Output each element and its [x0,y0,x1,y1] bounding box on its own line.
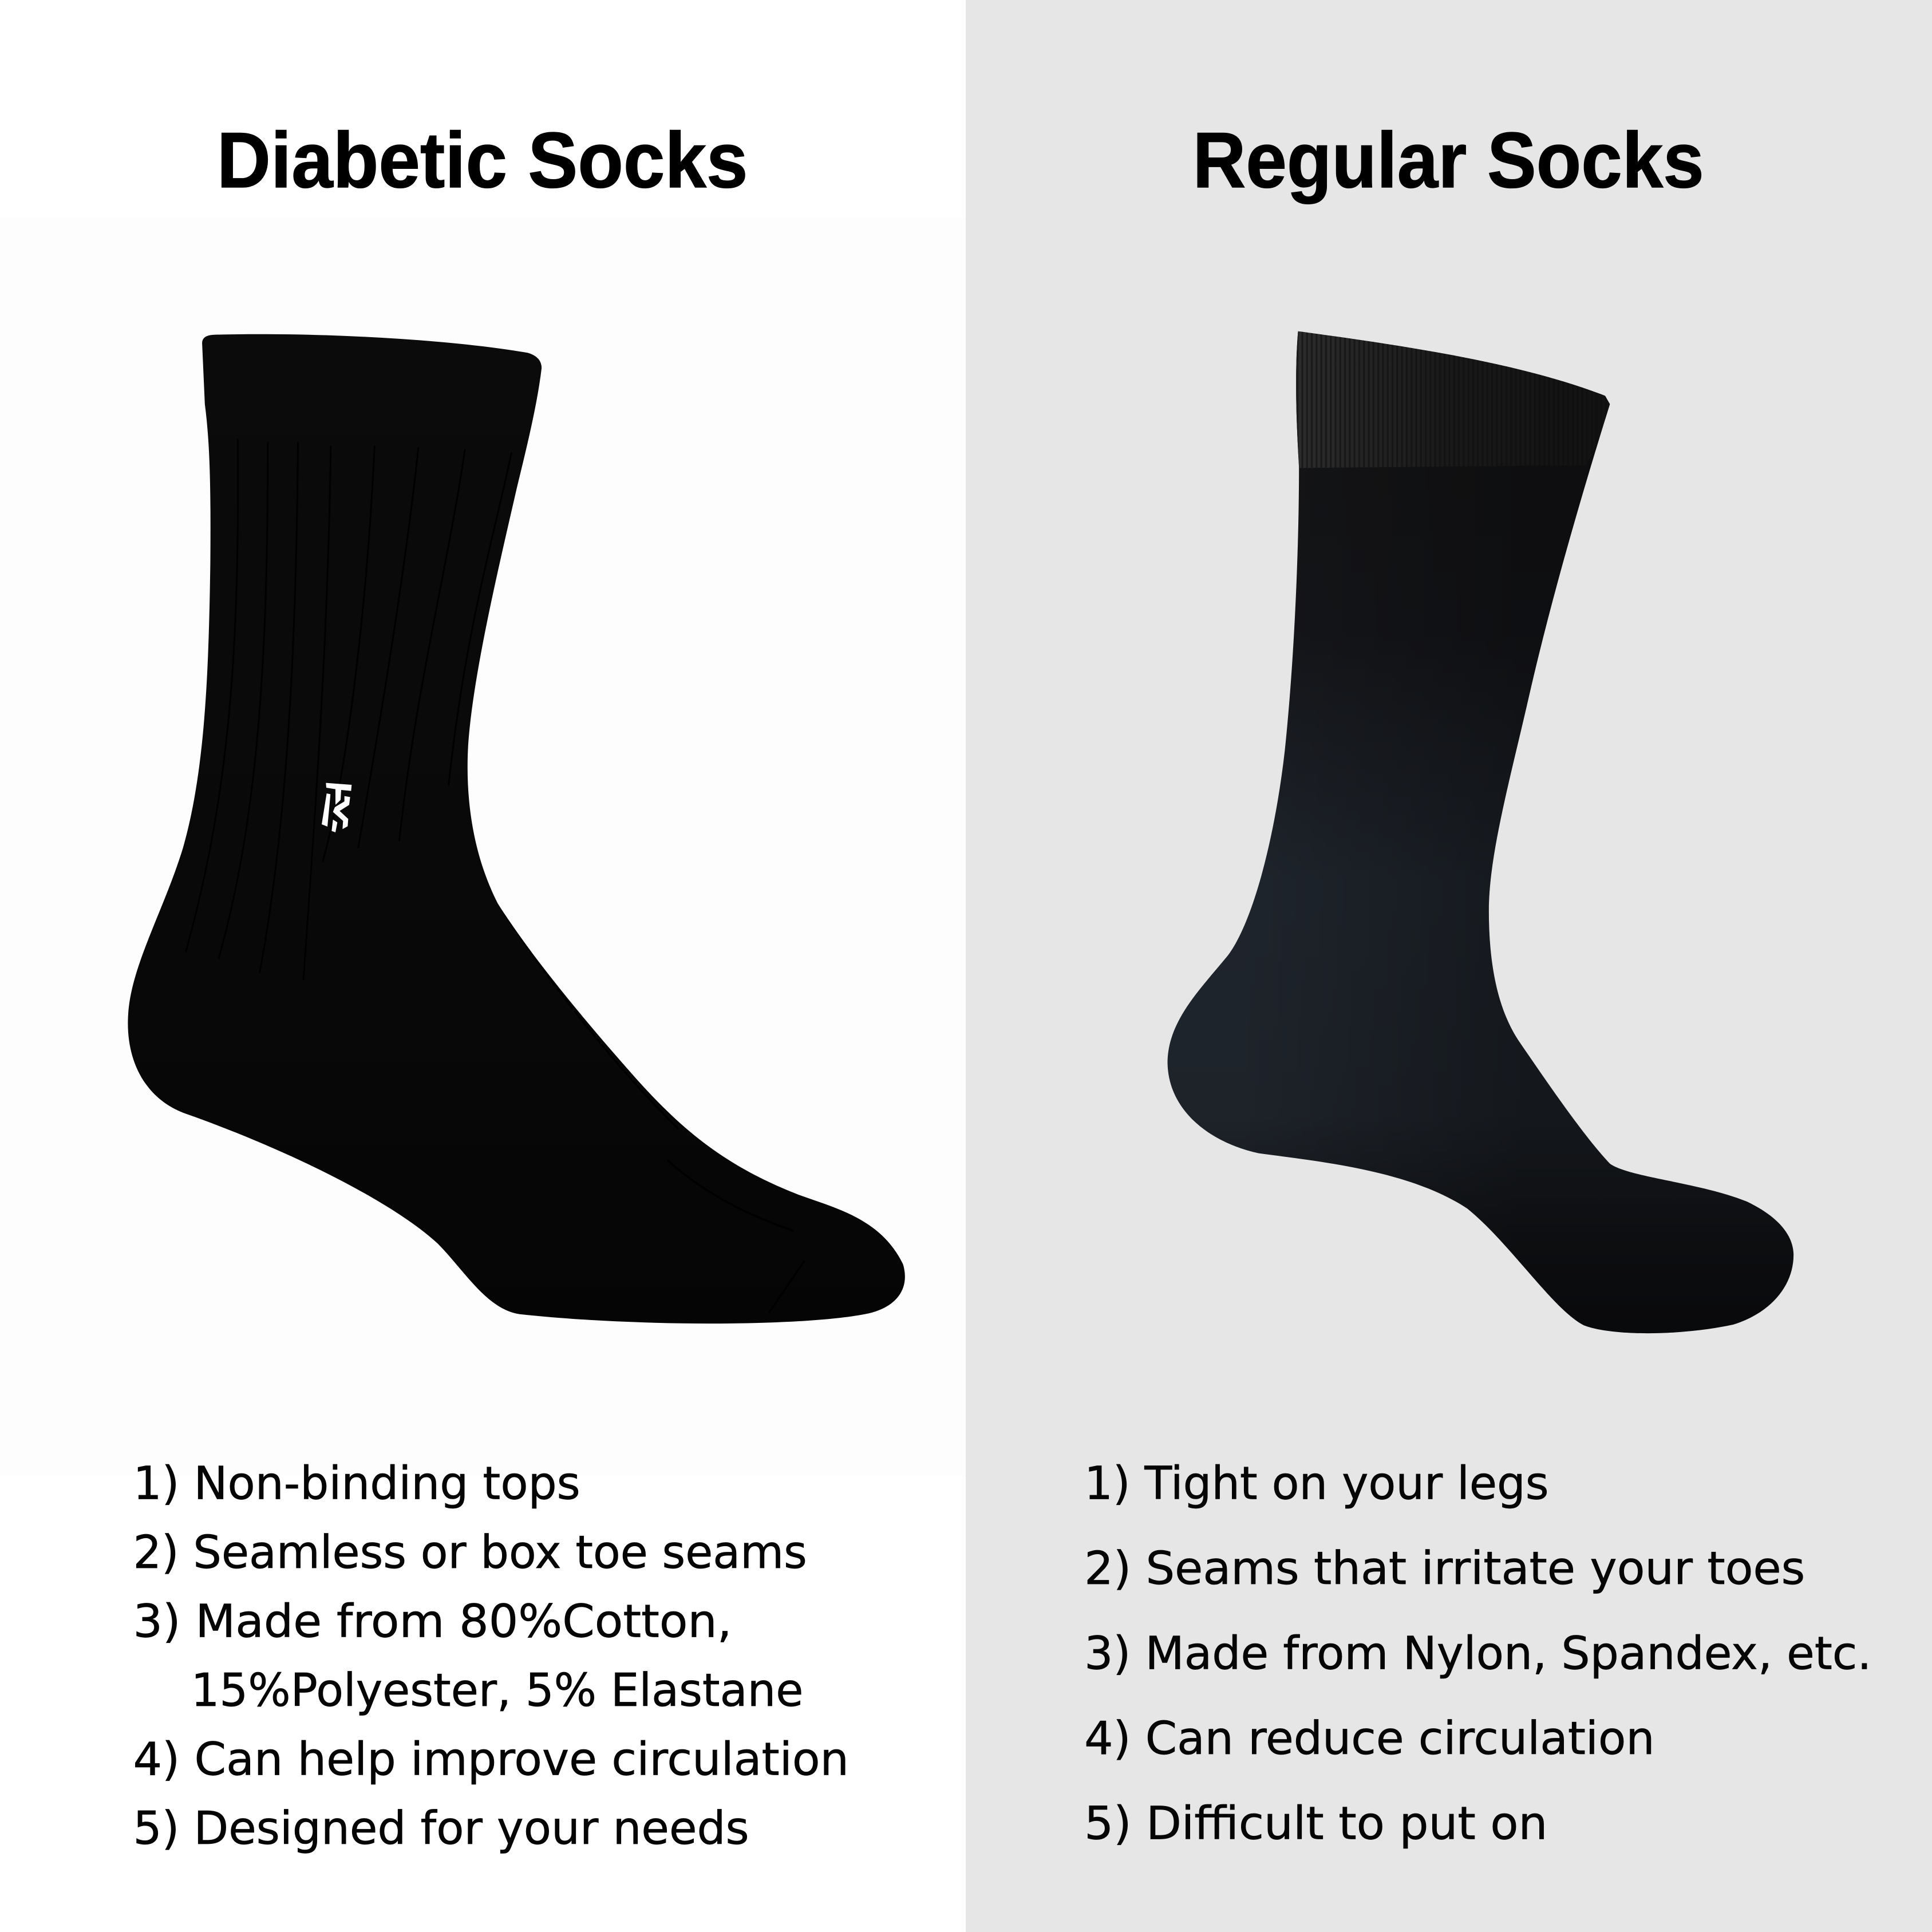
text block: diabetic sock features: 2) Seamless or box toe seams [133,1526,807,1579]
panel: regular socks column [1084,116,1872,1850]
panel: right background [966,0,1932,1932]
image: black ribbed diabetic sock [128,334,905,1323]
title: diabetic socks: Diabetic Socks [217,116,748,204]
logo: white TK monogram [322,783,351,832]
text block: regular sock features: 3) Made from Nylon, Spandex, etc. [1084,1626,1872,1680]
title: regular socks: Regular Socks [1193,116,1704,204]
text block: diabetic sock features: 3) Made from 80%Cotton, [133,1594,732,1647]
text block: regular sock features: 2) Seams that irritate your toes [1084,1542,1805,1595]
text block: regular sock features: 5) Difficult to put on [1084,1796,1547,1850]
text block: diabetic sock features: 1) Non-binding tops [133,1456,580,1510]
text block: diabetic sock features: 15%Polyester, 5% Elastane [191,1664,803,1717]
text block: diabetic sock features: 5) Designed for your needs [133,1801,749,1855]
text block: diabetic sock features: 4) Can help improve circulation [133,1733,849,1786]
panel: diabetic socks column [128,116,905,1855]
text block: regular sock features: 1) Tight on your legs [1084,1456,1549,1510]
panel: left photo background [0,217,966,1476]
text block: regular sock features [1084,1456,1872,1850]
image: plain dark regular sock [1168,328,1793,1333]
text block: regular sock features: 4) Can reduce circulation [1084,1712,1655,1765]
text block: diabetic sock features [133,1456,849,1855]
